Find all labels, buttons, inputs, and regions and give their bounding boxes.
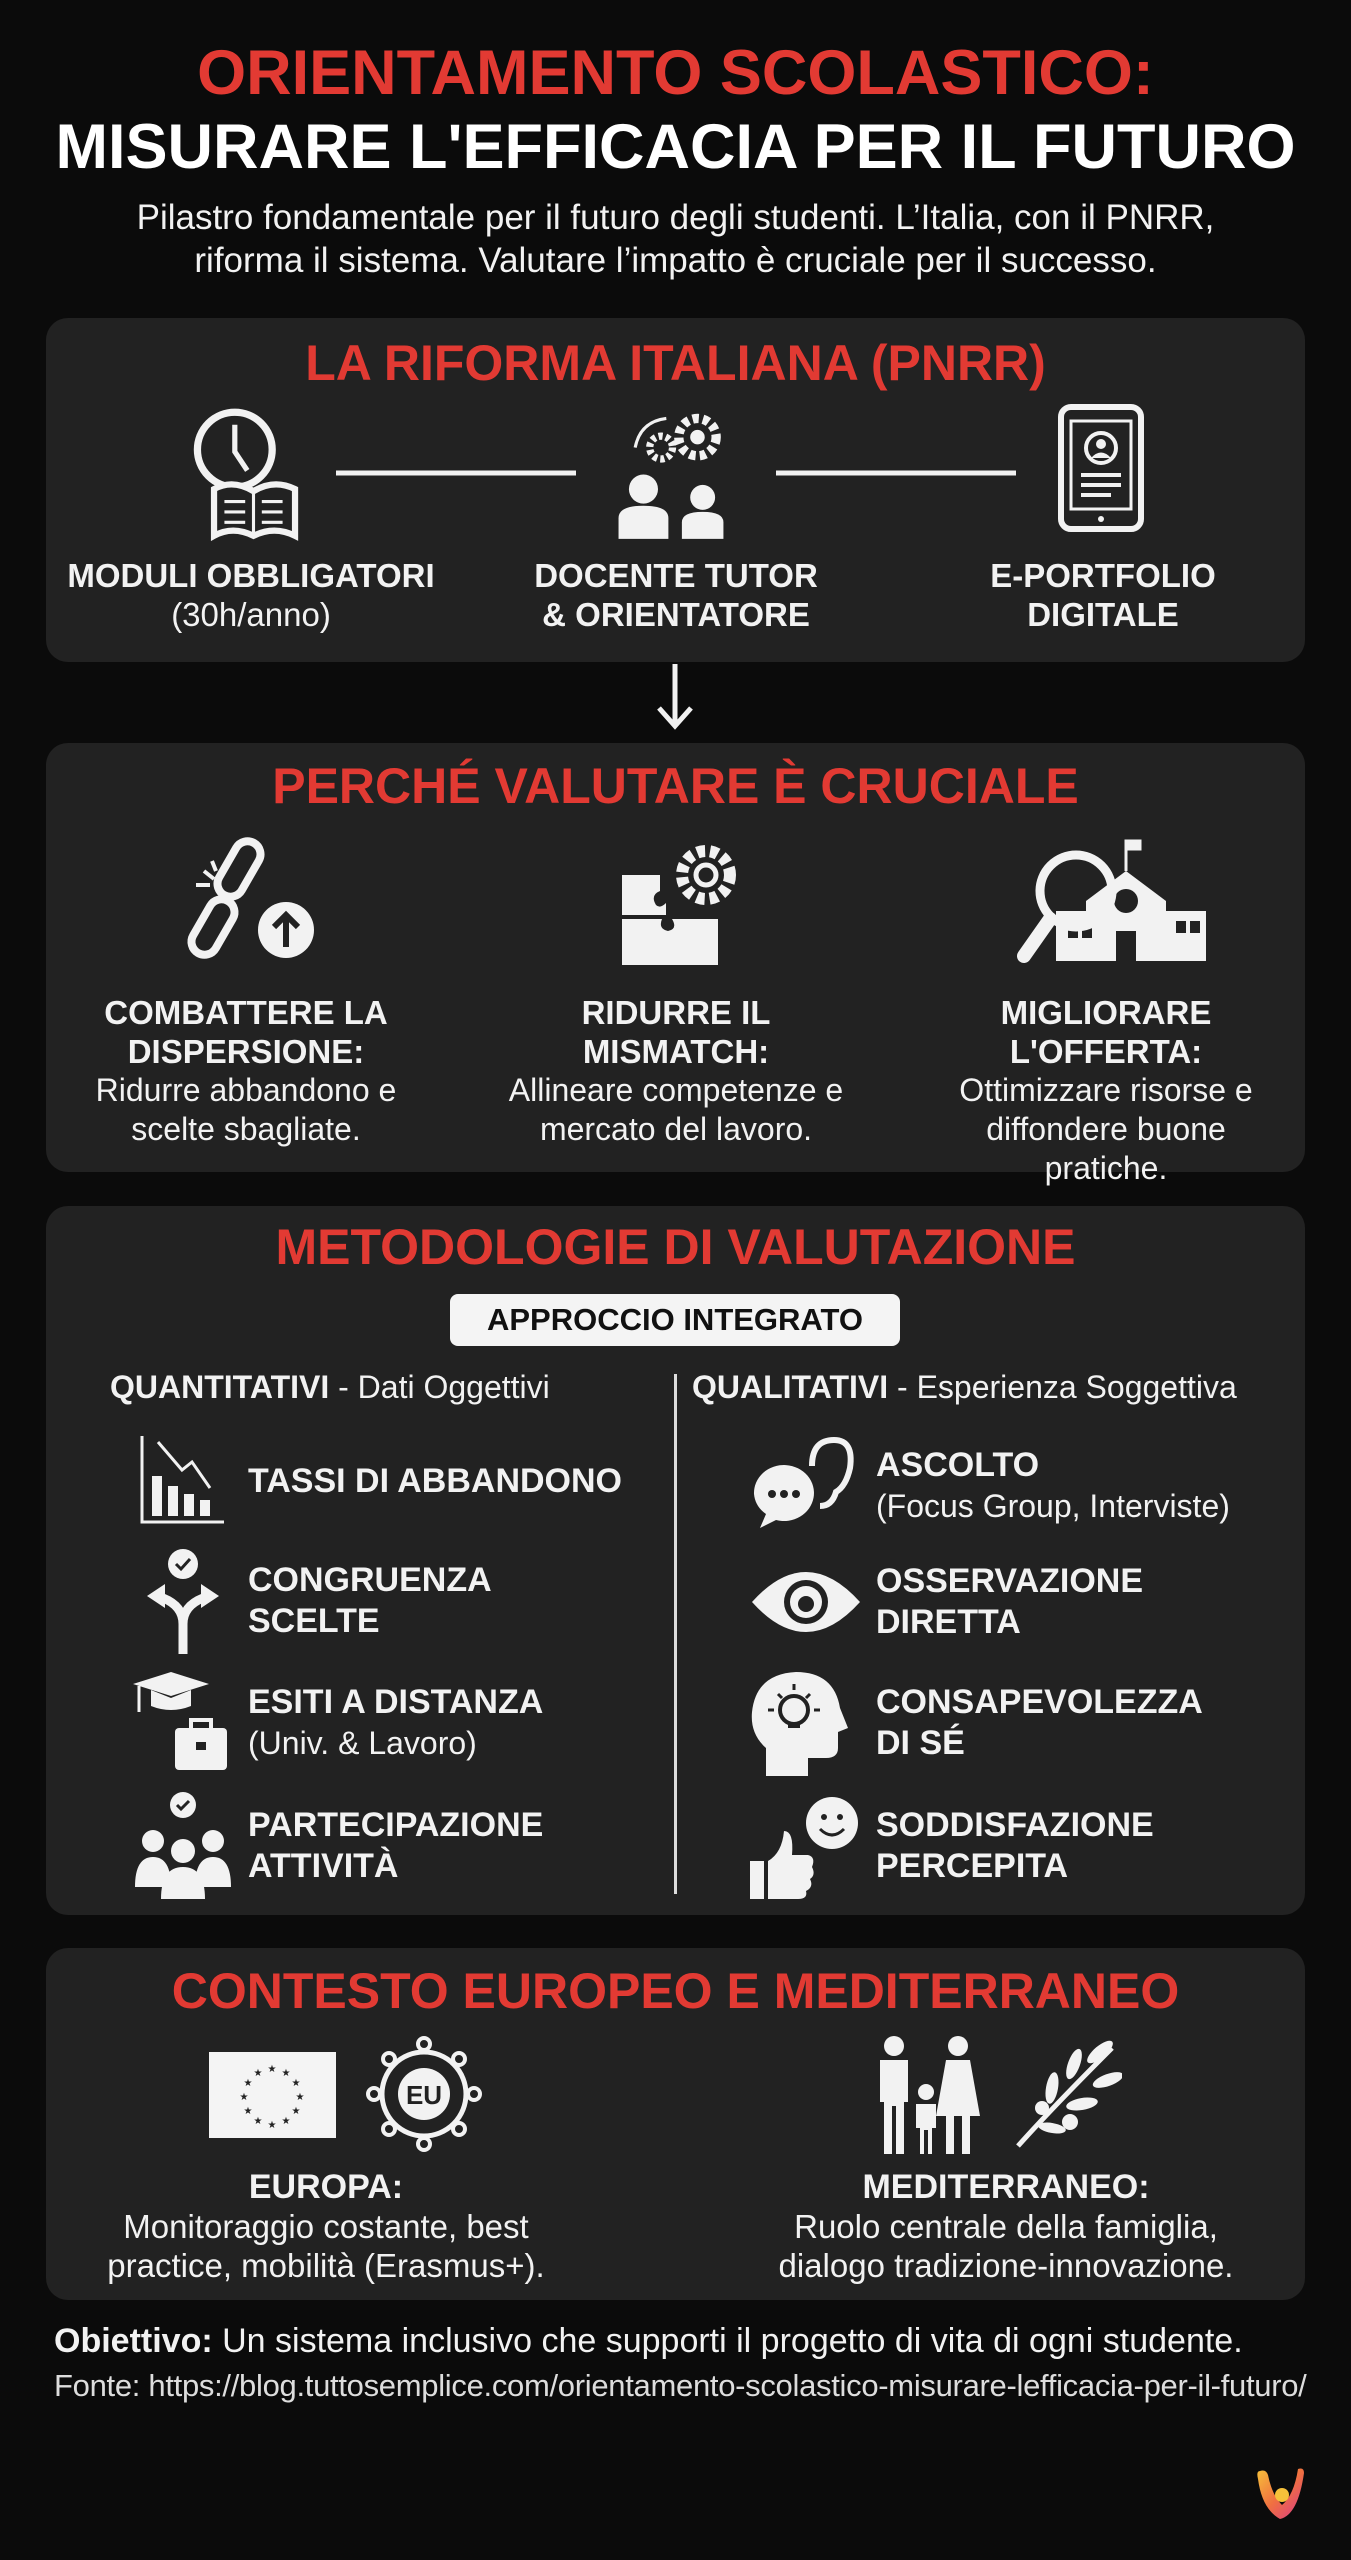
- icon: puzzle and gear: [622, 845, 736, 965]
- item: consapevolezza: DI SÉ: [876, 1724, 965, 1762]
- column header: quantitativi: QUANTITATIVI - Dati Oggettivi: [110, 1369, 550, 1405]
- text: combattere: COMBATTERE LA: [104, 994, 388, 1031]
- label: moduli: [67, 557, 435, 633]
- column header: qualitativi: QUALITATIVI - Esperienza Soggettiva: [692, 1369, 1237, 1405]
- item: esiti a distanza: ESITI A DISTANZA: [248, 1683, 543, 1721]
- heading: riforma: LA RIFORMA ITALIANA (PNRR): [305, 335, 1046, 391]
- text: europa: [107, 2168, 545, 2284]
- text: combattere: [96, 994, 396, 1147]
- icon: eu flag: ★: [268, 2064, 277, 2075]
- text: ridurre mismatch: [508, 994, 843, 1147]
- pill: approccio integrato: APPROCCIO INTEGRATO: [487, 1302, 863, 1337]
- arrow: [657, 664, 693, 730]
- icon: eu flag: ★: [268, 2120, 277, 2131]
- text: migliorare: Ottimizzare risorse e: [959, 1072, 1253, 1108]
- icon: eu flag: ★: [282, 2068, 291, 2079]
- text: migliorare: pratiche.: [1045, 1150, 1167, 1186]
- logo: [1257, 2468, 1304, 2519]
- item: esiti a distanza: (Univ. & Lavoro): [248, 1725, 477, 1761]
- icon: family: [880, 2036, 980, 2154]
- text: europa: practice, mobilità (Erasmus+).: [107, 2247, 545, 2284]
- heading: contesto: CONTESTO EUROPEO E MEDITERRANEO: [172, 1963, 1179, 2019]
- item: osservazione: [752, 1562, 1143, 1641]
- icon: olive branch: [1016, 2040, 1122, 2148]
- label: e-portfolio: E-PORTFOLIO: [990, 557, 1216, 594]
- subtitle: Pilastro fondamentale per il futuro degli studenti. L’Italia, con il PNRR,: [137, 198, 1214, 237]
- item: congruenza scelte: SCELTE: [248, 1602, 380, 1640]
- panel: perché valutare: [46, 743, 1305, 1172]
- icon: eu network: [366, 2036, 482, 2152]
- heading: perché: PERCHÉ VALUTARE È CRUCIALE: [272, 758, 1079, 814]
- label: moduli: MODULI OBBLIGATORI: [67, 557, 435, 594]
- label: e-portfolio: DIGITALE: [1027, 596, 1179, 633]
- text: europa: Monitoraggio costante, best: [123, 2208, 529, 2245]
- text: ridurre mismatch: mercato del lavoro.: [540, 1111, 812, 1147]
- text: combattere: DISPERSIONE:: [128, 1033, 364, 1070]
- icon: eu network: EU: [406, 2080, 442, 2110]
- icon: eu flag: ★: [240, 2092, 249, 2103]
- icon: magnifier over school: [1017, 840, 1206, 963]
- label: docente: [534, 557, 818, 633]
- icon: tutor with gears: [618, 414, 724, 539]
- icon: eu flag: ★: [292, 2106, 301, 2117]
- item: partecipazione attività: ATTIVITÀ: [248, 1847, 398, 1885]
- subtitle: riforma il sistema. Valutare l’impatto è cruciale per il successo.: [194, 241, 1157, 280]
- item: soddisfazione: [750, 1797, 1154, 1899]
- title: ORIENTAMENTO SCOLASTICO:: [197, 38, 1154, 108]
- item: consapevolezza: [752, 1672, 1203, 1776]
- text: migliorare: diffondere buone: [986, 1111, 1226, 1147]
- icon: clock and book: [194, 408, 298, 541]
- text: mediterraneo: MEDITERRANEO:: [862, 2168, 1150, 2206]
- label: docente: & ORIENTATORE: [542, 596, 810, 633]
- icon: eu flag: ★: [244, 2106, 253, 2117]
- item: tassi di abbandono: [140, 1436, 622, 1524]
- icon: eu flag: ★: [292, 2078, 301, 2089]
- text: europa: EUROPA:: [249, 2168, 403, 2206]
- icon: eu flag: ★: [296, 2092, 305, 2103]
- item: osservazione: DIRETTA: [876, 1603, 1021, 1641]
- panel: la riforma italiana: [46, 318, 1305, 662]
- item: partecipazione attività: [135, 1792, 543, 1899]
- text: ridurre mismatch: RIDURRE IL: [582, 994, 770, 1031]
- panel: contesto europeo: [46, 1948, 1305, 2300]
- text: ridurre mismatch: MISMATCH:: [583, 1033, 769, 1070]
- item: esiti a distanza: [133, 1672, 543, 1770]
- item: ascolto: (Focus Group, Interviste): [876, 1488, 1230, 1524]
- item: soddisfazione: SODDISFAZIONE: [876, 1806, 1154, 1844]
- item: tassi di abbandono: TASSI DI ABBANDONO: [248, 1462, 622, 1500]
- item: consapevolezza: CONSAPEVOLEZZA: [876, 1683, 1203, 1721]
- item: ascolto: ASCOLTO: [876, 1446, 1039, 1484]
- text: mediterraneo: [778, 2168, 1233, 2284]
- connector lines: [336, 470, 1016, 476]
- item: congruenza scelte: [147, 1549, 492, 1654]
- item: partecipazione attività: PARTECIPAZIONE: [248, 1806, 543, 1844]
- icon: eu flag: ★: [282, 2116, 291, 2127]
- text: migliorare: MIGLIORARE: [1001, 994, 1211, 1031]
- icon: eu flag: ★: [254, 2068, 263, 2079]
- text: combattere: scelte sbagliate.: [131, 1111, 361, 1147]
- footer: obiettivo: Obiettivo: Un sistema inclusivo che supporti il progetto di vita di ogni studente.: [54, 2322, 1243, 2360]
- label: docente: DOCENTE TUTOR: [534, 557, 818, 594]
- footer: fonte: Fonte: https://blog.tuttosemplice.com/orientamento-scolastico-misurare-lefficacia-per-il-futuro/: [54, 2368, 1306, 2403]
- icon: broken chain: [188, 837, 314, 959]
- title: MISURARE L'EFFICACIA PER IL FUTURO: [56, 112, 1295, 182]
- icon: eu flag: ★: [254, 2116, 263, 2127]
- text: migliorare: L'OFFERTA:: [1010, 1033, 1202, 1070]
- item: soddisfazione: PERCEPITA: [876, 1847, 1068, 1885]
- heading: metodologie: METODOLOGIE DI VALUTAZIONE: [276, 1219, 1076, 1275]
- subtitle: [137, 198, 1214, 280]
- text: mediterraneo: Ruolo centrale della famiglia,: [794, 2208, 1218, 2245]
- text: ridurre mismatch: Allineare competenze e: [509, 1072, 843, 1108]
- title: [56, 38, 1295, 182]
- icon: eu flag: [209, 2052, 336, 2138]
- label: e-portfolio: [990, 557, 1216, 633]
- text: combattere: Ridurre abbandono e: [96, 1072, 396, 1108]
- item: congruenza scelte: CONGRUENZA: [248, 1561, 492, 1599]
- label: moduli: (30h/anno): [171, 596, 331, 633]
- panel: metodologie: [46, 1206, 1305, 1915]
- text: mediterraneo: dialogo tradizione-innovazione.: [778, 2247, 1233, 2284]
- item: ascolto: [754, 1437, 1230, 1528]
- pill: approccio integrato: [450, 1294, 900, 1346]
- item: osservazione: OSSERVAZIONE: [876, 1562, 1143, 1600]
- icon: tablet portfolio: [1058, 404, 1144, 532]
- divider: [674, 1374, 677, 1894]
- icon: eu flag: ★: [244, 2078, 253, 2089]
- text: migliorare: [959, 994, 1253, 1186]
